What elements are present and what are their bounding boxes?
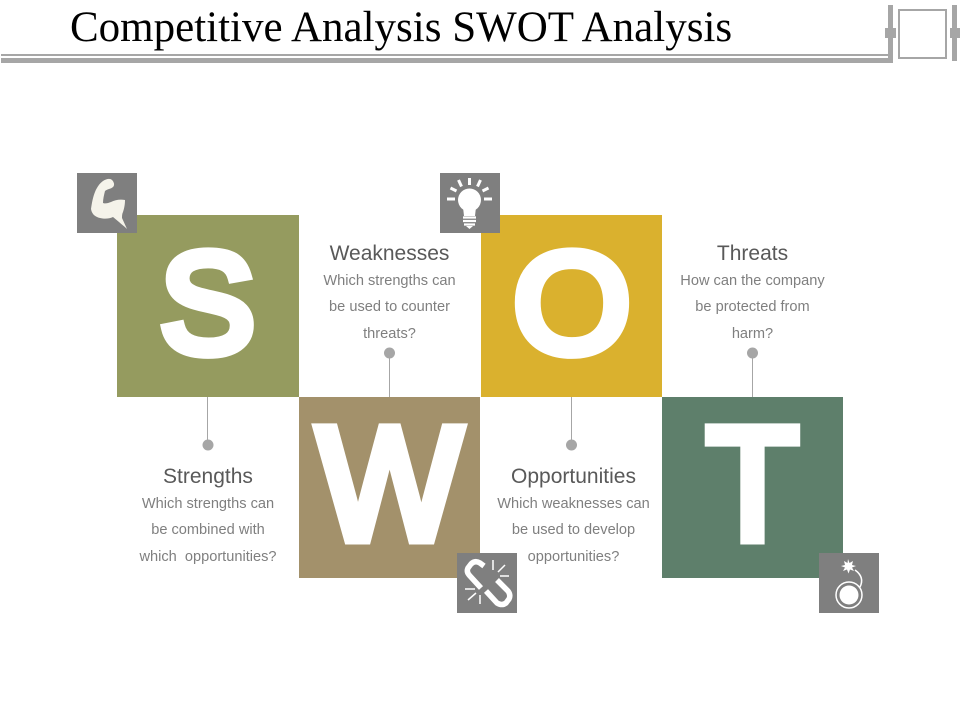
text block: threats: Threats: [717, 242, 788, 265]
text block: weaknesses: threats?: [363, 326, 416, 342]
text block: opportunities: Which weaknesses can: [497, 496, 650, 512]
text block: threats: [680, 242, 825, 342]
icon: light bulb: [440, 173, 500, 233]
text block: opportunities: Opportunities: [511, 465, 636, 488]
header frame: [1, 5, 960, 63]
text block: strengths: [138, 465, 277, 565]
panel: T square: T: [706, 394, 798, 573]
connector: strengths: [202, 397, 214, 450]
text block: strengths: Strengths: [163, 465, 253, 488]
text block: strengths: which opportunities?: [138, 549, 277, 565]
text block: opportunities: be used to develop: [512, 522, 635, 538]
text block: threats: be protected from: [695, 299, 810, 315]
icon: bomb: [819, 553, 879, 613]
text block: weaknesses: Which strengths can: [323, 273, 456, 289]
panel: O square: [481, 215, 662, 397]
text block: weaknesses: Weaknesses: [330, 242, 449, 265]
panel: T square: [662, 394, 843, 578]
text block: threats: How can the company: [680, 273, 825, 289]
connector: threats: [747, 348, 758, 397]
panel: S square: S: [160, 224, 255, 383]
text block: opportunities: [497, 465, 650, 565]
panel: O square: O: [514, 224, 630, 383]
connector: weaknesses: [384, 348, 395, 397]
icon: flexed arm: [77, 173, 137, 233]
text block: threats: harm?: [732, 326, 773, 342]
title: Competitive Analysis SWOT Analysis: [70, 4, 732, 51]
text block: weaknesses: be used to counter: [329, 299, 450, 315]
icon: broken chain: [457, 553, 517, 613]
connector: opportunities: [566, 397, 577, 450]
text block: strengths: Which strengths can: [142, 496, 274, 512]
text block: weaknesses: [323, 242, 456, 342]
text block: strengths: be combined with: [151, 522, 265, 538]
panel: S square: [117, 215, 299, 397]
panel: W square: W: [318, 394, 462, 573]
text block: opportunities: opportunities?: [528, 549, 619, 565]
